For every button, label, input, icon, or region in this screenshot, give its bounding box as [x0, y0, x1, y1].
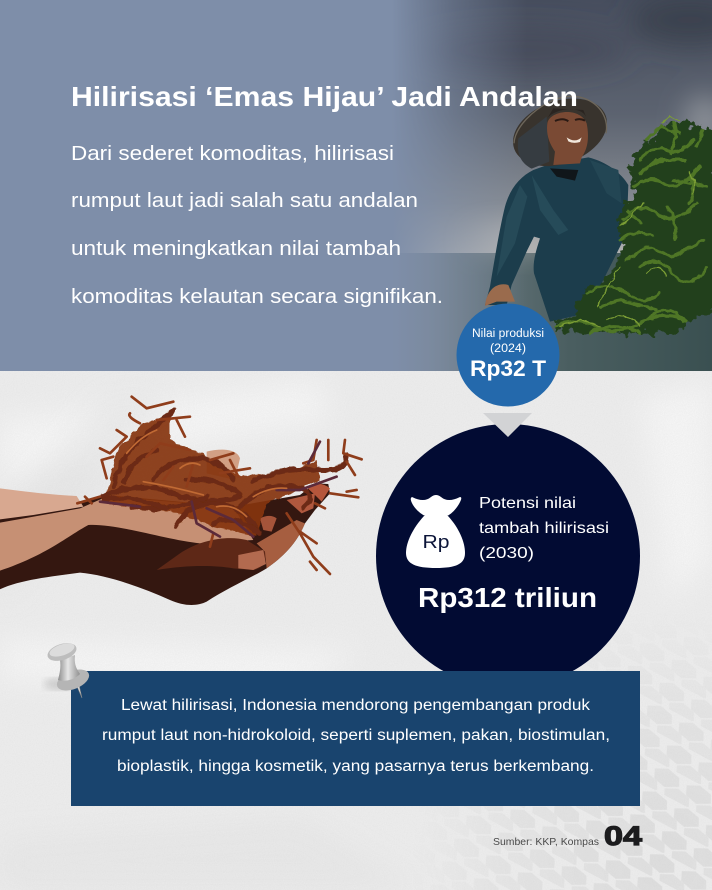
icon: red seaweed — [77, 397, 362, 574]
arrow: grey triangle — [483, 413, 532, 437]
callout panel: Lewat hilirisasi, Indonesia mendorong pengembangan produk — [121, 697, 590, 714]
small circle: production value: Nilai produksi — [472, 328, 544, 340]
small circle: production value — [456, 304, 560, 406]
big circle value: Rp312 triliun — [418, 582, 597, 613]
page number: 04 — [604, 821, 642, 851]
small circle: production value: Rp32 T — [470, 356, 547, 381]
photo: seaweed farmer — [485, 86, 712, 333]
big circle: potential added value — [376, 424, 640, 688]
photo: hands holding red seaweed — [0, 397, 362, 605]
intro text block: Dari sederet komoditas, hilirisasi — [71, 143, 394, 165]
big circle label: Potensi nilai — [479, 495, 576, 512]
icon: money bag: Rp — [422, 532, 450, 552]
lower textured background — [0, 371, 712, 890]
icon: hand — [485, 284, 515, 306]
intro text block: untuk meningkatkan nilai tambah — [71, 238, 401, 260]
callout panel: bioplastik, hingga kosmetik, yang pasarnya terus berkembang. — [117, 758, 594, 775]
intro text block: rumput laut jadi salah satu andalan — [71, 190, 418, 212]
big circle label: (2030) — [479, 545, 534, 562]
intro text block: komoditas kelautan secara signifikan. — [71, 286, 443, 308]
intro text block — [71, 143, 443, 308]
big circle label: tambah hilirisasi — [479, 520, 609, 537]
big circle label — [479, 495, 609, 562]
icon: push pin — [44, 640, 92, 698]
icon: hand — [0, 450, 330, 605]
icon: money bag — [406, 495, 465, 568]
icon: farmer body — [485, 157, 628, 322]
icon: green seaweed pile — [555, 117, 712, 333]
callout panel: rumput laut non-hidrokoloid, seperti suplemen, pakan, biostimulan, — [102, 727, 610, 744]
small circle: production value: (2024) — [490, 343, 526, 355]
icon: conical hat — [504, 86, 616, 178]
callout panel — [71, 671, 640, 806]
panel: header photo with sky and sea — [0, 0, 712, 371]
title: Hilirisasi ‘Emas Hijau’ Jadi Andalan — [71, 81, 578, 112]
icon: face — [547, 112, 588, 165]
source note: Sumber: KKP, Kompas — [493, 836, 599, 848]
